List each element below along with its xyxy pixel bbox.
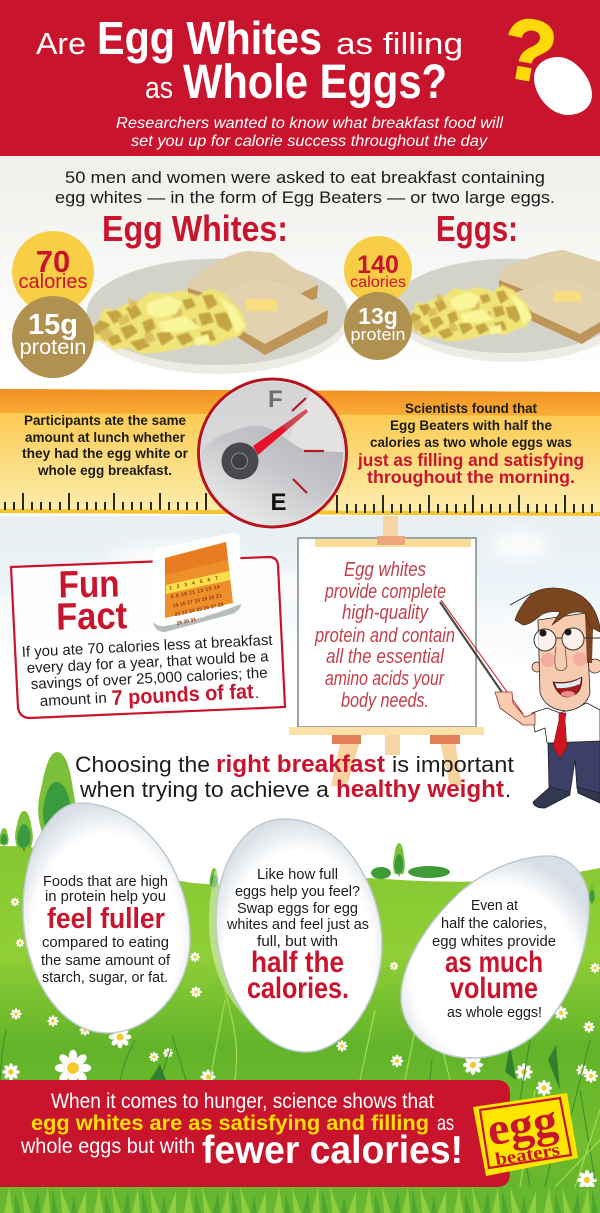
egg text: feel fuller xyxy=(47,903,165,935)
heading: right breakfast: Choosing the xyxy=(75,752,210,777)
conclusion text: as xyxy=(437,1112,454,1135)
fun fact body: savings of over 25,000 calories; the xyxy=(30,664,268,693)
fun fact body: every day for a year, that would be a xyxy=(26,648,270,677)
fun fact heading: Fact xyxy=(56,595,128,639)
egg text: compared to eating xyxy=(42,934,169,951)
handwritten note: Egg whites xyxy=(344,559,426,581)
badge: 15g protein xyxy=(12,296,94,378)
egg shape xyxy=(401,856,589,1058)
badge: 15g protein: 15g xyxy=(28,309,78,341)
shirt and tie xyxy=(532,703,600,758)
pointer stick xyxy=(440,600,523,723)
icon: calendar: 8 9 10 11 12 13 14 xyxy=(170,584,221,601)
gauge ticks xyxy=(292,398,324,493)
fun fact body: . xyxy=(255,685,259,702)
conclusion text: egg whites are as satisfying and filling xyxy=(31,1112,429,1135)
gauge knob xyxy=(222,442,258,480)
handwritten note: amino acids your xyxy=(325,668,445,690)
logo: egg beaters: beaters xyxy=(494,1139,561,1169)
easel xyxy=(289,516,484,786)
study intro text xyxy=(55,168,555,207)
egg text: as much xyxy=(445,946,543,979)
title: as xyxy=(145,70,173,105)
mouth xyxy=(553,677,582,697)
conclusion text: whole eggs but with xyxy=(20,1135,195,1158)
title: Are xyxy=(36,26,86,61)
badge: 15g protein: protein xyxy=(20,336,86,359)
conclusion text xyxy=(20,1090,463,1172)
egg: as much volume xyxy=(401,856,589,1058)
fun fact body: If you ate 70 calories less at breakfast xyxy=(21,632,274,661)
title: Egg Whites xyxy=(97,12,322,64)
right finding text: throughout the morning. xyxy=(367,467,575,487)
teacher character xyxy=(440,588,600,808)
badge: 140 calories: 140 xyxy=(357,251,399,279)
egg text xyxy=(432,897,556,1021)
left finding text: whole egg breakfast. xyxy=(37,463,172,478)
egg: half the calories xyxy=(209,802,382,1052)
egg text: Swap eggs for egg xyxy=(237,900,358,917)
conclusion text: When it comes to hunger, science shows that xyxy=(51,1090,434,1113)
icon: calendar: 22 23 24 25 26 27 28 xyxy=(174,602,224,618)
header banner xyxy=(0,0,600,156)
egg text xyxy=(226,866,369,1005)
heading: right breakfast xyxy=(75,751,514,803)
ruler band xyxy=(0,389,600,516)
egg text: Like how full xyxy=(257,866,338,883)
egg text: in protein help you xyxy=(45,888,166,905)
trees xyxy=(0,752,596,904)
study intro text: 50 men and women were asked to eat breakfast containing xyxy=(65,168,545,187)
right finding text: calories as two whole eggs was xyxy=(370,435,572,450)
meadow xyxy=(0,752,600,1213)
egg shape xyxy=(23,803,190,1033)
egg text: eggs help you feel? xyxy=(235,883,360,900)
heading: egg whites: Egg Whites: xyxy=(102,208,288,249)
subtitle xyxy=(116,115,504,150)
sideburn xyxy=(585,613,593,663)
left finding text xyxy=(22,413,189,478)
conclusion banner xyxy=(0,1080,510,1187)
badge: 70 calories xyxy=(12,231,94,313)
egg halo xyxy=(209,802,382,1052)
nose xyxy=(555,647,567,670)
gauge needle xyxy=(253,409,308,455)
fuel gauge xyxy=(197,378,348,528)
subtitle: set you up for calorie success throughout the day xyxy=(131,133,488,150)
icon: calendar xyxy=(152,533,241,632)
ears xyxy=(532,659,600,673)
daisies xyxy=(2,898,600,1200)
egg text: egg whites provide xyxy=(432,933,556,950)
egg text: half the calories, xyxy=(441,915,547,932)
left finding text: amount at lunch whether xyxy=(25,430,186,445)
handwritten note: body needs. xyxy=(341,690,429,712)
conclusion text: fewer calories! xyxy=(202,1129,463,1172)
badge: 140 calories xyxy=(344,236,412,304)
title: as filling xyxy=(336,26,463,61)
fun fact body: 7 pounds of fat xyxy=(111,680,254,710)
study section background xyxy=(0,156,600,371)
egg text: calories. xyxy=(247,972,349,1005)
icon: calendar: 15 16 17 18 19 20 21 xyxy=(172,593,223,609)
badge: 13g protein xyxy=(344,292,412,360)
egg shape xyxy=(216,819,382,1052)
heading: right breakfast: right breakfast xyxy=(216,751,385,778)
icon: question mark and egg: ? xyxy=(495,0,563,103)
handwritten note: all the essential xyxy=(326,646,444,668)
egg text xyxy=(41,873,171,986)
plate: whole eggs breakfast xyxy=(392,250,600,362)
study intro text: egg whites — in the form of Egg Beaters — or two large eggs. xyxy=(55,188,555,207)
icon: calendar: 1 2 3 4 5 6 7 xyxy=(169,575,219,592)
badge: 70 calories: 70 xyxy=(36,244,70,279)
icon: calendar: 29 30 31 xyxy=(176,617,197,627)
egg text: half the xyxy=(251,946,344,979)
badge: 70 calories: calories xyxy=(18,271,88,293)
egg text: starch, sugar, or fat. xyxy=(42,969,168,986)
face xyxy=(538,613,590,711)
heading: eggs: Eggs: xyxy=(436,208,518,249)
handwritten note: provide complete xyxy=(324,581,446,603)
left finding text: they had the egg white or xyxy=(22,446,189,461)
title xyxy=(36,12,463,109)
heading: right breakfast: . xyxy=(505,777,511,802)
egg text: Even at xyxy=(471,897,519,914)
badge: 13g protein: 13g xyxy=(358,303,398,329)
hand xyxy=(495,692,535,725)
easel board xyxy=(298,538,476,727)
egg: feel fuller xyxy=(23,803,190,1033)
egg text: volume xyxy=(450,972,538,1005)
fun fact body xyxy=(21,632,274,710)
cheeks xyxy=(541,652,587,667)
ruler ticks xyxy=(5,493,592,513)
fun fact heading: Fun xyxy=(58,563,120,607)
badge: 140 calories: calories xyxy=(350,274,406,291)
handwritten note: high-quality xyxy=(342,602,429,624)
heading: right breakfast: when trying to achieve a xyxy=(79,777,330,802)
icon: question mark and egg xyxy=(495,0,592,115)
logo: egg beaters xyxy=(473,1093,578,1176)
trousers and shoes xyxy=(533,740,600,808)
pupils xyxy=(540,628,572,636)
egg text: full, but with xyxy=(257,933,338,950)
title: Whole Eggs? xyxy=(183,56,447,109)
right finding text: just as filling and satisfying xyxy=(357,450,584,470)
egg text: the same amount of xyxy=(41,952,171,969)
badge: 13g protein: protein xyxy=(350,325,406,344)
fun fact body: amount in xyxy=(39,690,107,710)
glasses xyxy=(534,628,600,651)
gauge F: F xyxy=(268,386,283,413)
heading: right breakfast: is important xyxy=(392,752,514,777)
right finding text: Egg Beaters with half the xyxy=(390,418,552,433)
egg text: whites and feel just as xyxy=(226,916,369,933)
handwritten note: protein and contain xyxy=(314,625,455,647)
egg text: as whole eggs! xyxy=(447,1004,542,1021)
easel top bar xyxy=(315,536,471,547)
left finding text: Participants ate the same xyxy=(24,413,186,428)
egg text: Foods that are high xyxy=(43,873,168,890)
logo: egg beaters: egg xyxy=(484,1094,561,1155)
right finding text: Scientists found that xyxy=(405,401,537,416)
easel tray xyxy=(289,727,484,735)
handwritten note xyxy=(314,559,455,712)
heading: right breakfast: healthy weight xyxy=(336,776,504,803)
easel legs xyxy=(331,516,462,786)
plate: egg whites breakfast xyxy=(86,251,350,374)
foreground grass xyxy=(0,990,600,1213)
hair xyxy=(510,588,600,632)
gauge E: E xyxy=(270,489,287,516)
subtitle: Researchers wanted to know what breakfast food will xyxy=(116,115,504,132)
right finding text xyxy=(357,401,584,487)
fun fact heading xyxy=(55,563,128,639)
fun fact panel xyxy=(11,533,285,718)
sky and clouds xyxy=(0,516,600,660)
